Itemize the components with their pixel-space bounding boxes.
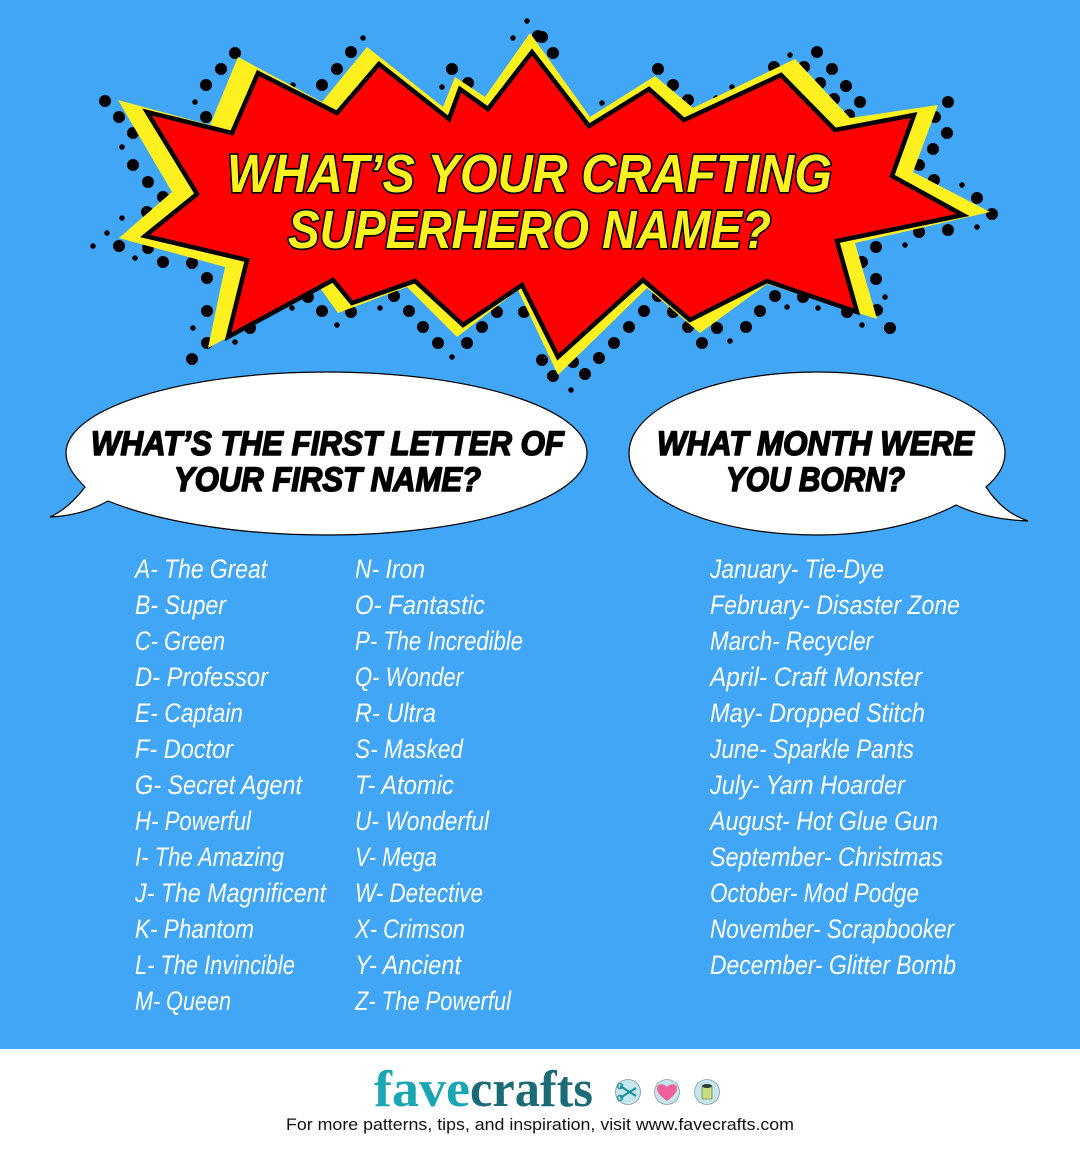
yellow burst shadow (118, 33, 990, 375)
list: letters A to M: K- Phantom (135, 914, 254, 944)
question text: WHAT MONTH WERE (657, 425, 975, 463)
halftone dots (93, 21, 992, 390)
list: letters A to M: M- Queen (135, 986, 231, 1016)
footer band (0, 1049, 1080, 1155)
list: letters N to Z: W- Detective (355, 878, 483, 908)
list: letters N to Z: S- Masked (355, 734, 464, 764)
list: birth months: June- Sparkle Pants (709, 734, 914, 764)
list: birth months (708, 554, 960, 980)
list: letters A to M: I- The Amazing (135, 842, 284, 872)
list: birth months: July- Yarn Hoarder (709, 770, 906, 800)
list: birth months: November- Scrapbooker (710, 914, 955, 944)
list: letters A to M: D- Professor (135, 662, 269, 692)
title text (227, 144, 832, 260)
icon: scissors (616, 1080, 640, 1104)
icon: heart (654, 1080, 680, 1104)
list: birth months: December- Glitter Bomb (710, 950, 956, 980)
question text (657, 425, 975, 499)
FaveCrafts logo: crafts (470, 1061, 593, 1118)
footer call to action: For more patterns, tips, and inspiration, visit www.favecrafts.com (286, 1115, 794, 1134)
list: letters N to Z: Q- Wonder (355, 662, 464, 692)
speech bubble: first letter question (50, 372, 587, 535)
list: letters A to M (133, 554, 327, 1016)
list: letters N to Z: P- The Incredible (355, 626, 523, 656)
list: letters N to Z: U- Wonderful (355, 806, 490, 836)
list: letters N to Z: Y- Ancient (355, 950, 462, 980)
icon: thread spool (694, 1080, 720, 1104)
speech bubble: birth month question (629, 372, 1028, 535)
list: birth months: September- Christmas (710, 842, 943, 872)
FaveCrafts logo: fave (374, 1061, 470, 1118)
list: letters N to Z: N- Iron (355, 554, 425, 584)
list: birth months: May- Dropped Stitch (710, 698, 925, 728)
list: birth months: August- Hot Glue Gun (708, 806, 938, 836)
list: letters N to Z: O- Fantastic (355, 590, 485, 620)
list: letters N to Z: X- Crimson (354, 914, 465, 944)
list: letters A to M: A- The Great (133, 554, 268, 584)
list: letters A to M: F- Doctor (135, 734, 234, 764)
FaveCrafts logo (374, 1061, 593, 1118)
list: birth months: October- Mod Podge (710, 878, 919, 908)
list: letters N to Z: V- Mega (355, 842, 437, 872)
list: letters N to Z: T- Atomic (355, 770, 454, 800)
comic burst title graphic (93, 21, 992, 390)
list: letters A to M: G- Secret Agent (135, 770, 303, 800)
list: birth months: February- Disaster Zone (710, 590, 960, 620)
list: letters N to Z: R- Ultra (355, 698, 436, 728)
list: letters A to M: H- Powerful (135, 806, 252, 836)
title text: WHAT’S YOUR CRAFTING (227, 144, 832, 204)
question text (91, 425, 565, 499)
title text: SUPERHERO NAME? (288, 200, 771, 260)
red burst with black outline (145, 52, 963, 357)
list: letters A to M: B- Super (135, 590, 227, 620)
list: birth months: April- Craft Monster (708, 662, 923, 692)
list: letters N to Z (354, 554, 523, 1016)
question text: YOU BORN? (726, 461, 905, 499)
list: birth months: January- Tie-Dye (709, 554, 884, 584)
list: letters A to M: E- Captain (135, 698, 243, 728)
list: letters A to M: C- Green (135, 626, 225, 656)
question text: WHAT’S THE FIRST LETTER OF (91, 425, 565, 463)
question text: YOUR FIRST NAME? (174, 461, 481, 499)
list: letters A to M: J- The Magnificent (134, 878, 327, 908)
list: birth months: March- Recycler (710, 626, 874, 656)
list: letters N to Z: Z- The Powerful (354, 986, 512, 1016)
list: letters A to M: L- The Invincible (135, 950, 295, 980)
